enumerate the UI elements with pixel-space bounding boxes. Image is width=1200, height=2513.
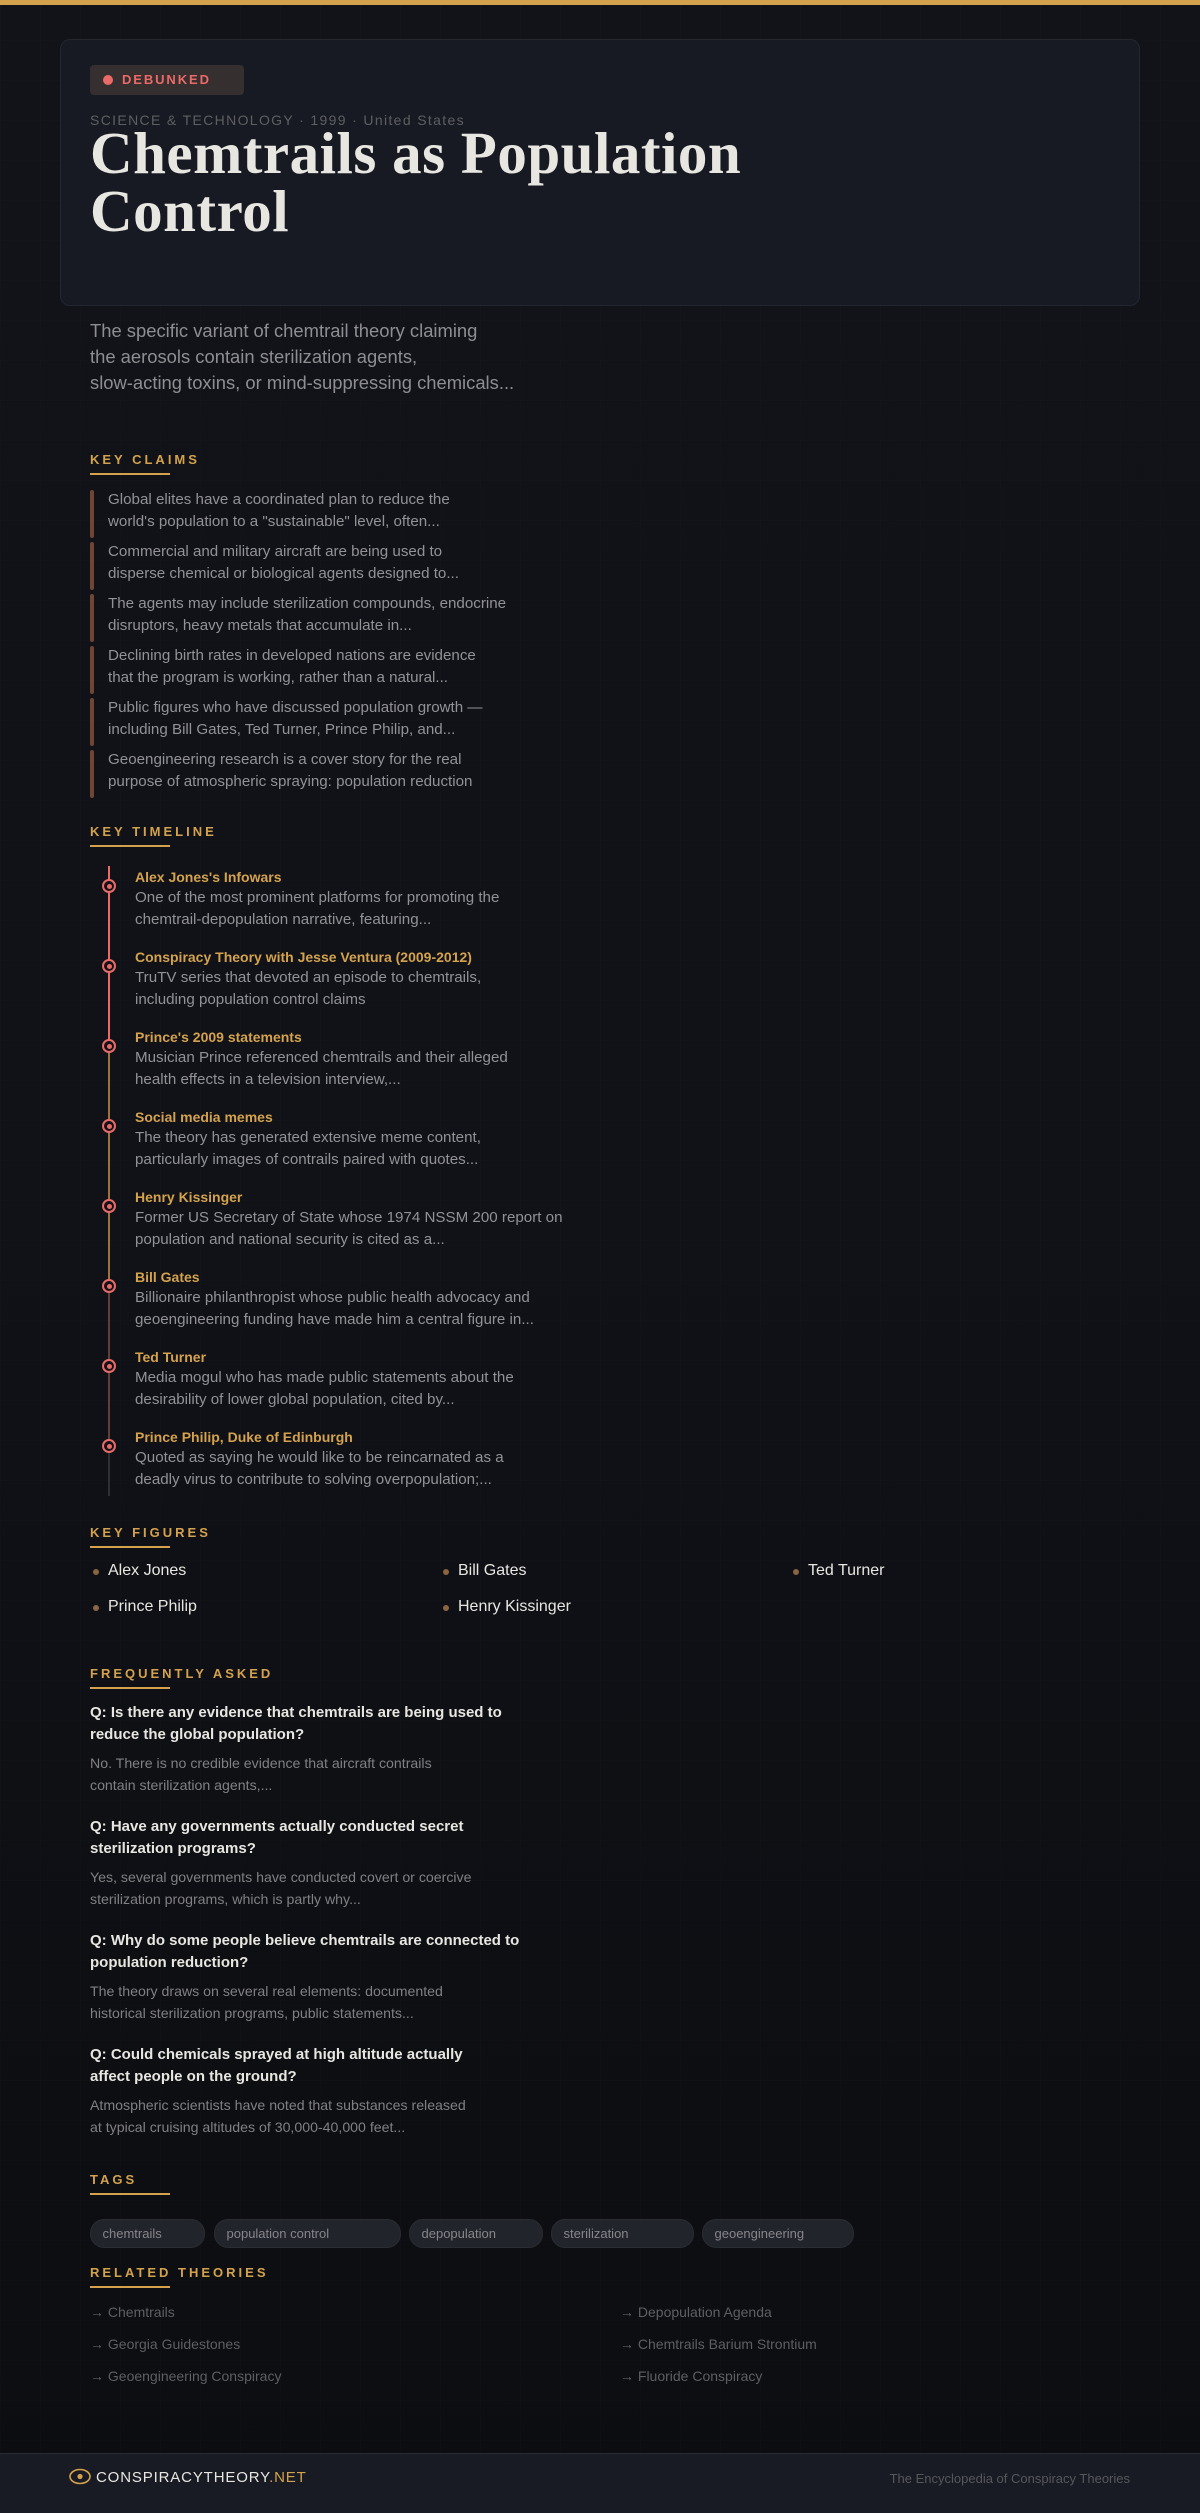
- FAQ item 3: historical sterilization programs, public statements...: [90, 2005, 414, 2021]
- claim 4: Declining birth rates in developed nations are evidence: [108, 647, 476, 664]
- related: Georgia Guidestones: → Georgia Guidestones: [90, 2336, 240, 2352]
- claim 6: [90, 750, 472, 798]
- claim 2: Commercial and military aircraft are being used to: [108, 543, 442, 560]
- event: Bill Gates: geoengineering funding have made him a central figure in...: [135, 1311, 534, 1328]
- claim 3: disruptors, heavy metals that accumulate in...: [108, 617, 412, 634]
- timeline: [102, 866, 563, 1496]
- FAQ item 4: [90, 2046, 466, 2135]
- claim 3: [90, 594, 506, 642]
- related theories list: [90, 2304, 817, 2384]
- tag: sterilization: [551, 2219, 694, 2248]
- heading: frequently asked: FREQUENTLY ASKED: [90, 1666, 273, 1681]
- related: Depopulation Agenda: → Depopulation Agenda: [620, 2304, 772, 2320]
- FAQ item 1: No. There is no credible evidence that aircraft contrails: [90, 1755, 432, 1771]
- event: Henry Kissinger: [135, 1189, 563, 1248]
- event: Social media memes: Social media memes: [135, 1109, 273, 1125]
- timeline marker 6: [102, 1279, 116, 1293]
- key figures list: [93, 1562, 884, 1615]
- event: Ted Turner: [135, 1349, 514, 1408]
- tag: sterilization: sterilization: [564, 2226, 629, 2241]
- FAQ item 2: sterilization programs?: [90, 1840, 256, 1857]
- event: Conspiracy Theory with Jesse Ventura: including population control claims: [135, 991, 366, 1008]
- timeline marker 7: [102, 1359, 116, 1373]
- claim 4: that the program is working, rather than a natural...: [108, 669, 448, 686]
- FAQ item 2: Yes, several governments have conducted covert or coercive: [90, 1869, 471, 1885]
- event: Conspiracy Theory with Jesse Ventura: [135, 949, 481, 1008]
- figure: Bill Gates: Bill Gates: [458, 1562, 526, 1579]
- claim 1: Global elites have a coordinated plan to reduce the: [108, 491, 450, 508]
- claim 2: disperse chemical or biological agents designed to...: [108, 565, 459, 582]
- event: Conspiracy Theory with Jesse Ventura: TruTV series that devoted an episode to chemtrails,: [135, 969, 481, 986]
- footer tagline: The Encyclopedia of Conspiracy Theories: [890, 2471, 1130, 2486]
- heading: key timeline: KEY TIMELINE: [90, 824, 217, 839]
- FAQ item 3: [90, 1932, 519, 2021]
- icon: eye logo: [69, 2468, 91, 2484]
- figure: Alex Jones: Alex Jones: [108, 1562, 186, 1579]
- footer: [0, 2453, 1200, 2513]
- FAQ item 4: at typical cruising altitudes of 30,000-40,000 feet...: [90, 2119, 405, 2135]
- FAQ item 3: The theory draws on several real elements: documented: [90, 1983, 443, 1999]
- FAQ item 1: contain sterilization agents,...: [90, 1777, 272, 1793]
- tag: depopulation: depopulation: [422, 2226, 496, 2241]
- tag: population control: [214, 2219, 401, 2248]
- panel: header: [60, 39, 1140, 306]
- FAQ item 3: population reduction?: [90, 1954, 248, 1971]
- event: Social media memes: The theory has generated extensive meme content,: [135, 1129, 481, 1146]
- claim 3: The agents may include sterilization compounds, endocrine: [108, 595, 506, 612]
- status badge: debunked: [90, 65, 244, 95]
- heading: tags: TAGS: [90, 2172, 137, 2187]
- event: Prince's 2009 statements: Prince's 2009 statements: [135, 1029, 302, 1045]
- event: Prince Philip: deadly virus to contribute to solving overpopulation;...: [135, 1471, 492, 1488]
- event: Social media memes: particularly images of contrails paired with quotes...: [135, 1151, 478, 1168]
- event: Ted Turner: desirability of lower global population, cited by...: [135, 1391, 455, 1408]
- claim 5: including Bill Gates, Ted Turner, Prince Philip, and...: [108, 721, 455, 738]
- event: Ted Turner: Media mogul who has made public statements about the: [135, 1369, 514, 1386]
- timeline marker 8: [102, 1439, 116, 1453]
- icon: status dot: [103, 75, 113, 85]
- event: Henry Kissinger: Henry Kissinger: [135, 1189, 242, 1205]
- intro paragraph: slow-acting toxins, or mind-suppressing chemicals...: [90, 372, 514, 393]
- event: Prince Philip: Quoted as saying he would like to be reincarnated as a: [135, 1449, 504, 1466]
- FAQ item 4: affect people on the ground?: [90, 2068, 297, 2085]
- top accent bar: [0, 0, 1200, 5]
- related: Chemtrails: → Chemtrails: [90, 2304, 175, 2320]
- FAQ item 4: Atmospheric scientists have noted that substances released: [90, 2097, 466, 2113]
- intro paragraph: the aerosols contain sterilization agents,: [90, 346, 417, 367]
- claim 5: Public figures who have discussed population growth —: [108, 699, 483, 716]
- timeline marker 5: [102, 1199, 116, 1213]
- figure: Henry Kissinger: Henry Kissinger: [458, 1598, 571, 1615]
- tag: population control: population control: [226, 2226, 329, 2241]
- tag: chemtrails: chemtrails: [102, 2226, 162, 2241]
- event: Alex Jones's Infowars: chemtrail-depopulation narrative, featuring...: [135, 911, 431, 928]
- event: Social media memes: [135, 1109, 481, 1168]
- tag: depopulation: [409, 2219, 543, 2248]
- figure: Prince Philip: Prince Philip: [108, 1598, 197, 1615]
- event: Henry Kissinger: population and national security is cited as a...: [135, 1231, 445, 1248]
- claim 6: purpose of atmospheric spraying: population reduction: [108, 773, 472, 790]
- timeline marker 2: [102, 959, 116, 973]
- related: Chemtrails Barium Strontium: → Chemtrails Barium Strontium: [620, 2336, 817, 2352]
- FAQ item 1: [90, 1704, 502, 1793]
- heading: key figures: KEY FIGURES: [90, 1525, 211, 1540]
- title: Chemtrails as Population: [90, 120, 741, 186]
- timeline marker 4: [102, 1119, 116, 1133]
- event: Prince Philip: [135, 1429, 504, 1488]
- figure: Ted Turner: Ted Turner: [808, 1562, 884, 1579]
- FAQ item 2: Q: Have any governments actually conducted secret: [90, 1818, 463, 1835]
- timeline marker 1: [102, 879, 116, 893]
- claim 4: [90, 646, 476, 694]
- claim 1: world's population to a "sustainable" level, often...: [108, 513, 440, 530]
- event: Prince's 2009 statements: Musician Prince referenced chemtrails and their alleged: [135, 1049, 508, 1066]
- FAQ item 4: Q: Could chemicals sprayed at high altitude actually: [90, 2046, 463, 2063]
- related: Fluoride Conspiracy: → Fluoride Conspiracy: [620, 2368, 762, 2384]
- event: Bill Gates: [135, 1269, 534, 1328]
- tag: chemtrails: [90, 2219, 205, 2248]
- heading: related theories: RELATED THEORIES: [90, 2265, 268, 2280]
- event: Conspiracy Theory with Jesse Ventura: Conspiracy Theory with Jesse Ventura (2009-2012): [135, 949, 472, 965]
- panel: key claims: [90, 490, 506, 798]
- event: Bill Gates: Billionaire philanthropist whose public health advocacy and: [135, 1289, 530, 1306]
- title: Control: [90, 178, 289, 244]
- claim 6: Geoengineering research is a cover story for the real: [108, 751, 461, 768]
- intro paragraph: [90, 320, 514, 393]
- event: Alex Jones's Infowars: One of the most prominent platforms for promoting the: [135, 889, 499, 906]
- FAQ item 2: [90, 1818, 471, 1907]
- timeline marker 3: [102, 1039, 116, 1053]
- event: Alex Jones's Infowars: Alex Jones's Infowars: [135, 869, 282, 885]
- FAQ item 1: reduce the global population?: [90, 1726, 304, 1743]
- FAQ item 1: Q: Is there any evidence that chemtrails are being used to: [90, 1704, 502, 1721]
- event: Alex Jones's Infowars: [135, 869, 499, 928]
- FAQ item 2: sterilization programs, which is partly why...: [90, 1891, 361, 1907]
- badge label: DEBUNKED: [122, 72, 211, 87]
- related: Geoengineering Conspiracy: → Geoengineering Conspiracy: [90, 2368, 281, 2384]
- title: [90, 120, 741, 244]
- event: Prince's 2009 statements: health effects in a television interview,...: [135, 1071, 401, 1088]
- event: Ted Turner: Ted Turner: [135, 1349, 206, 1365]
- claim 2: [90, 542, 459, 590]
- FAQ item 3: Q: Why do some people believe chemtrails are connected to: [90, 1932, 519, 1949]
- event: Prince's 2009 statements: [135, 1029, 508, 1088]
- tag: geoengineering: geoengineering: [714, 2226, 804, 2241]
- tag: geoengineering: [702, 2219, 854, 2248]
- meta line: SCIENCE & TECHNOLOGY · 1999 · United States: [90, 112, 465, 128]
- FAQ list: [90, 1704, 519, 2135]
- event: Henry Kissinger: Former US Secretary of State whose 1974 NSSM 200 report on: [135, 1209, 563, 1226]
- intro paragraph: The specific variant of chemtrail theory claiming: [90, 320, 477, 341]
- event: Bill Gates: Bill Gates: [135, 1269, 200, 1285]
- event: Prince Philip: Prince Philip, Duke of Edinburgh: [135, 1429, 353, 1445]
- tags row: [90, 2219, 854, 2248]
- claim 5: [90, 698, 483, 746]
- claim 1: [90, 490, 450, 538]
- heading: key claims: KEY CLAIMS: [90, 452, 200, 467]
- logo wordmark: CONSPIRACYTHEORY.NET: [96, 2469, 307, 2486]
